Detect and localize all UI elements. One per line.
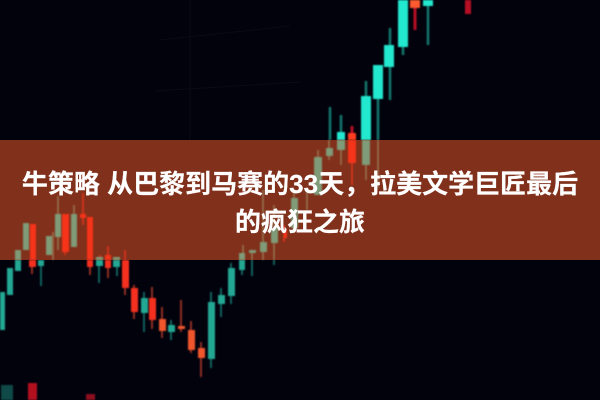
bottom edge candles: [1, 383, 95, 400]
title: [22, 169, 578, 237]
title: 牛策略 从巴黎到马赛的33天，拉美文学巨匠最后: [22, 169, 578, 199]
candles seen through band: [14, 139, 380, 261]
title: 的疯狂之旅: [235, 207, 365, 237]
lower falling candles: [0, 260, 274, 377]
upper right rising candles: [330, 0, 468, 140]
title band: [0, 140, 600, 260]
